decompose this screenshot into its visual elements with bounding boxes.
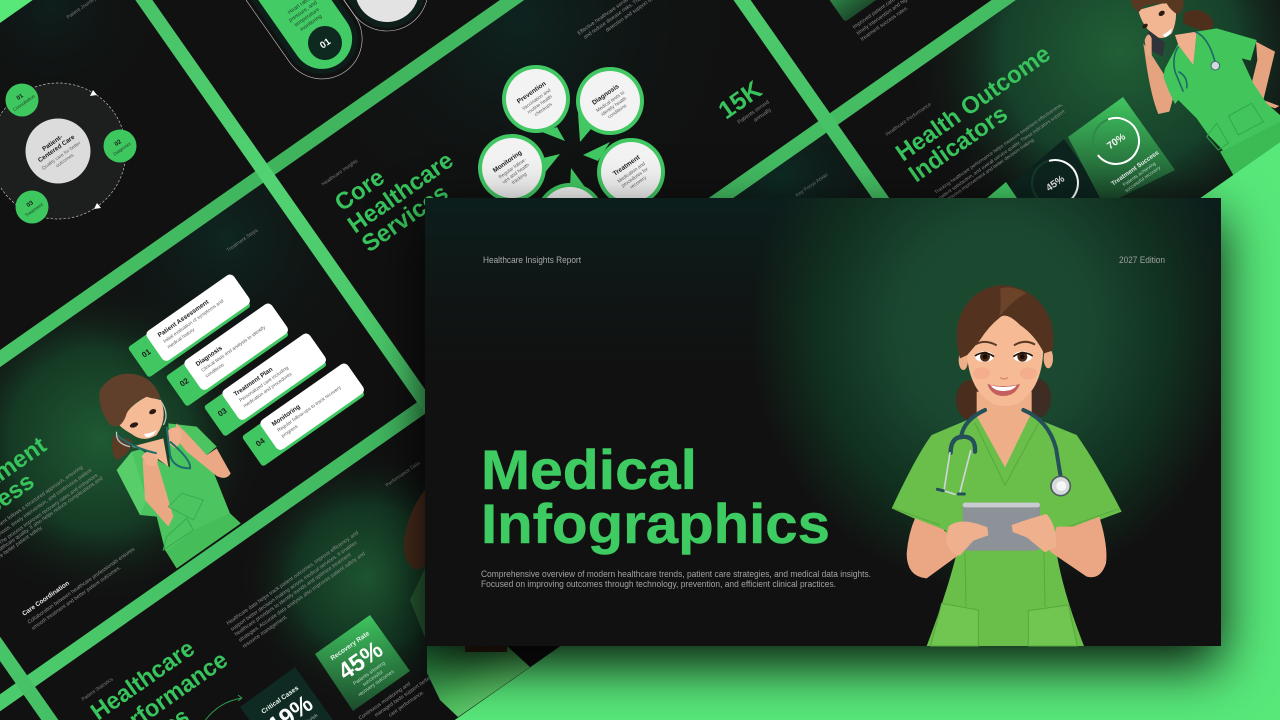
step card 02: Clinical tests and analysis to identify xyxy=(200,324,267,374)
step card 01: medical history xyxy=(166,327,196,350)
step card 04: progress xyxy=(280,423,300,439)
text: performance description: support better decision-making across medical services. It enables xyxy=(230,540,359,633)
bubble: prevention: Prevention xyxy=(516,80,547,105)
hands xyxy=(946,514,1056,556)
panel: health outcome indicators xyxy=(885,0,1280,240)
text: subtitle description: Focused on improving outcomes through technology, prevention, and efficient clinical practices. xyxy=(481,578,836,589)
stethoscope xyxy=(937,410,1061,494)
head xyxy=(957,285,1053,406)
pill: first monitoring item xyxy=(223,0,378,95)
step card 03: Treatment Plan xyxy=(233,366,274,398)
heading: health outcome indicators: Health Outcome xyxy=(891,40,1056,167)
title: medical infographics: Infographics xyxy=(481,492,830,555)
heading: core healthcare services: Healthcare xyxy=(343,147,458,239)
bubble: diagnosis: Medical tests to xyxy=(595,90,626,114)
card: 45 percent ring: 45% xyxy=(1044,174,1067,194)
cycle diagram: 01 xyxy=(16,93,25,102)
title: medical infographics xyxy=(481,438,830,555)
panel: care results xyxy=(812,0,915,43)
main title slide background xyxy=(425,198,1221,646)
cycle diagram: Diagnosis xyxy=(112,141,132,157)
text: care coordination: Care Coordination xyxy=(21,580,71,618)
step card 03: Personalized care including xyxy=(238,365,290,404)
text: performance description: strategies. Accurate data analysis also improves patient safety and xyxy=(238,551,367,644)
text: care coordination: smooth treatment and better patient outcomes. xyxy=(31,565,122,632)
stat: 15K patients: annually xyxy=(753,107,773,124)
panel: core healthcare services xyxy=(321,0,773,258)
pill: first monitoring item: 01 xyxy=(318,36,334,51)
step card 03: medication and procedures xyxy=(242,371,294,409)
cycle diagram: Consultation xyxy=(12,93,36,112)
panel: treatment process xyxy=(0,227,368,632)
text: performance description: resource management. xyxy=(242,614,289,650)
bubble: prevention: checkups xyxy=(533,101,554,118)
card: recovery rate: successful xyxy=(362,669,384,688)
ponytail hair xyxy=(956,379,1051,420)
step card 01: 01 xyxy=(140,347,153,360)
bubble: diagnosis xyxy=(576,67,644,142)
panel: patient journey xyxy=(0,0,136,223)
card: recovery rate xyxy=(315,615,410,711)
forearms xyxy=(907,517,1106,578)
text: performance description: Healthcare data helps track patient outcomes, improve efficiency, and xyxy=(226,530,360,627)
bubble: treatment: procedures for xyxy=(621,166,650,189)
card: recovery rate: recovery outcomes xyxy=(357,669,396,698)
card: recovery rate: Recovery Rate xyxy=(329,630,371,662)
step card 02 xyxy=(164,302,292,407)
bubble: monitoring: Regular follow- xyxy=(498,157,528,180)
label: healthcare insights: Healthcare Insights xyxy=(321,158,360,188)
nurse on phone xyxy=(1131,0,1280,175)
pockets xyxy=(931,603,1077,646)
bubble: treatment: Treatment xyxy=(612,154,642,178)
cycle diagram xyxy=(0,83,136,224)
bubble: diagnosis: Diagnosis xyxy=(591,83,621,107)
bubble: treatment xyxy=(583,138,665,206)
label: healthcare performance: Healthcare Performance xyxy=(885,102,933,138)
card: 70 percent ring: Treatment Success xyxy=(1110,149,1161,187)
panel: key focus areas: Key Focus Areas xyxy=(795,172,830,199)
pill: first monitoring item: monitoring xyxy=(299,14,323,33)
scrub details xyxy=(893,423,1120,607)
card: 70 percent ring xyxy=(1068,97,1175,200)
text: monitoring note: care performance. xyxy=(388,690,426,719)
neck xyxy=(977,392,1032,468)
step card 03: 03 xyxy=(216,406,229,419)
card: 70 percent ring: 70% xyxy=(1105,132,1128,152)
scrub top xyxy=(892,416,1122,646)
stethoscope chest piece xyxy=(1051,476,1070,496)
step card 03 xyxy=(202,332,330,437)
text: care result note: treatment success rates. xyxy=(860,5,909,43)
card: 70 percent ring: successful recovery xyxy=(1124,165,1162,194)
bubble: monitoring: ups and health xyxy=(501,162,531,185)
pill: first monitoring item: temperature xyxy=(294,7,321,28)
bubble: monitoring xyxy=(478,134,560,202)
bubble: diagnosis: identify health xyxy=(600,96,628,118)
card: critical cases: Critical Cases xyxy=(260,685,300,716)
heading: core healthcare services: Services xyxy=(357,179,453,258)
text: care coordination: Collaboration between healthcare professionals ensures xyxy=(27,546,136,626)
text: subtitle description: Comprehensive overview of modern healthcare trends, patient care strategies, and medical data insights. xyxy=(481,568,871,579)
cycle diagram: Treatment xyxy=(24,201,45,218)
title: medical infographics: Medical xyxy=(481,438,697,501)
heading: core healthcare services: Core xyxy=(330,164,390,217)
pill: second monitoring item xyxy=(285,0,444,47)
text: monitoring note: managed beds support better xyxy=(374,675,433,719)
label: report name: Healthcare Insights Report xyxy=(483,255,581,265)
bubble: prevention: Vaccination and xyxy=(521,87,552,112)
step card 02: 02 xyxy=(178,376,191,389)
cycle diagram: Patient- xyxy=(41,134,64,153)
card: critical cases xyxy=(240,667,340,720)
panel: healthcare performance metrics xyxy=(81,460,530,720)
bubble: recovery xyxy=(536,168,604,251)
pill: first monitoring item: pressure, and xyxy=(288,0,318,24)
step card 01 xyxy=(126,273,254,378)
bubble: monitoring: tracking xyxy=(511,171,528,186)
panel: vital sign pills xyxy=(223,0,444,95)
cycle diagram: 03 xyxy=(26,200,35,209)
card: result tile xyxy=(812,0,910,22)
text: indicators description: Tracking healthcare performance helps measure treatment effectiveness, xyxy=(934,102,1064,196)
step card 04: 04 xyxy=(254,436,267,449)
cycle diagram: Quality care for better xyxy=(41,140,82,172)
bubble: prevention: routine health xyxy=(526,94,554,116)
tablet xyxy=(963,503,1040,551)
bubble: treatment: Medication and xyxy=(617,161,647,185)
card: recovery rate: 45% xyxy=(333,636,388,686)
card: 45 percent ring xyxy=(1009,139,1107,240)
step card 02: Diagnosis xyxy=(195,345,224,368)
bubble: prevention xyxy=(502,65,570,141)
illustration: nurse holding tablet xyxy=(892,285,1122,646)
cycle diagram: Centered Care xyxy=(37,133,77,164)
label: performance data: Performance Data xyxy=(385,460,422,489)
step card 02: conditions xyxy=(204,362,226,379)
card: 70 percent ring: Patients achieving xyxy=(1122,161,1157,188)
bubble: monitoring: Monitoring xyxy=(492,149,523,174)
step card 01: Initial evaluation of symptoms and xyxy=(162,298,225,345)
step card 04: Regular follow-ups to track recovery xyxy=(276,384,343,434)
bubble: treatment: recovery xyxy=(629,175,648,190)
card: small tile xyxy=(980,182,1017,204)
stat: 15K patients: 15K xyxy=(713,76,767,125)
stat: 15K patients: Patients served xyxy=(737,99,771,126)
heading: health outcome indicators: Indicators xyxy=(904,100,1013,188)
text: indicators description: patient satisfaction, and overall service quality. These indicators support xyxy=(938,108,1067,201)
text: indicators description: continuous improvement and better decision-making. xyxy=(941,137,1036,206)
cycle diagram: outcomes xyxy=(55,152,76,169)
bubble: diagnosis: conditions xyxy=(607,103,629,120)
text: performance description: healthcare providers to identify trends and optimize treatment xyxy=(234,552,353,638)
nurse behind main slide xyxy=(404,486,530,717)
label: edition: 2027 Edition xyxy=(1119,255,1165,265)
cycle diagram: 02 xyxy=(114,139,123,148)
text: subtitle description xyxy=(481,568,871,589)
step card 04 xyxy=(240,362,368,467)
step card 01: Patient Assessment xyxy=(157,298,211,339)
step card 04: Monitoring xyxy=(271,403,302,428)
arrow: curved connector xyxy=(204,695,242,720)
card: recovery rate: Patients showing xyxy=(352,660,387,687)
label: treatment steps: Treatment Steps xyxy=(226,227,260,254)
nurse with stethoscope xyxy=(99,374,241,568)
label: patient statistics: Patient Statistics xyxy=(81,676,115,703)
